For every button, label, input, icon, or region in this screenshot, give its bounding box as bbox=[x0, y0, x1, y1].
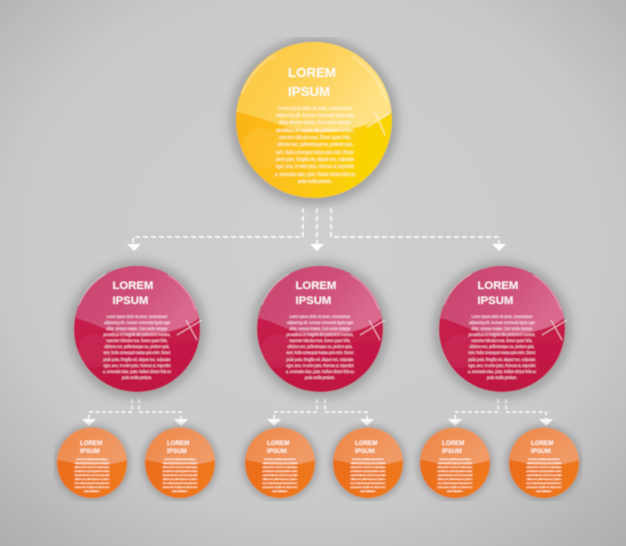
body text: penatibus et magnis dis parturient montes bbox=[438, 469, 473, 473]
heading: LOREM bbox=[531, 440, 553, 447]
body text: adipiscing elit. Aenean commodo ligula bbox=[162, 461, 198, 465]
circle: orange 4 bbox=[330, 424, 406, 502]
body text: eget, arcu. In enim justo, rhoncus ut, imperdiet bbox=[286, 363, 354, 368]
heading: LOREM bbox=[112, 280, 153, 292]
circle: orange 6: IPSUM bbox=[531, 448, 551, 455]
heading: LOREM bbox=[267, 440, 289, 447]
body text: a, venenatis vitae, justo. Nullam dictum felis eu bbox=[103, 369, 172, 374]
body text: pede mollis pretium. bbox=[360, 489, 376, 493]
body text: sem. Nulla consequat massa quis enim bbox=[162, 481, 198, 485]
body text: dolor. Aenean massa. Cum sociis natoque bbox=[262, 465, 298, 469]
body text: sem. Nulla consequat massa quis enim. Donec bbox=[286, 350, 354, 355]
circle: red middle bbox=[251, 261, 389, 399]
circle: orange 4: IPSUM bbox=[355, 448, 375, 455]
circle: orange 5: IPSUM bbox=[442, 448, 462, 455]
body text: pede justo, fringilla vel, aliquet nec, vulputate bbox=[468, 357, 536, 362]
body text: dolor. Aenean massa. Cum sociis natoque bbox=[526, 465, 562, 469]
body text: pede mollis pretium. bbox=[536, 489, 552, 493]
body text: pede justo, fringilla vel, aliquet nec bbox=[438, 485, 473, 489]
body text: ultricies nec, pellentesque eu, pretium bbox=[438, 477, 473, 481]
body text: pede mollis pretium. bbox=[447, 489, 463, 493]
circle: red middle: IPSUM bbox=[296, 295, 331, 307]
body text: dolor. Aenean massa. Cum sociis natoque bbox=[350, 465, 386, 469]
body text: eget, arcu. In enim justo, rhoncus ut, imperdiet bbox=[104, 363, 171, 368]
body text: ultricies nec, pellentesque eu, pretium bbox=[74, 477, 110, 481]
body text: penatibus et magnis dis parturient montes, bbox=[286, 332, 354, 337]
body text: penatibus et magnis dis parturient montes bbox=[74, 469, 110, 473]
connectors: middle branch bbox=[267, 399, 374, 426]
body text: penatibus et magnis dis parturient montes bbox=[262, 469, 298, 473]
circle: orange 3: IPSUM bbox=[267, 448, 287, 455]
body text: nascetur ridiculus mus. Donec quam felis, bbox=[472, 338, 532, 343]
body text: adipiscing elit. Aenean commodo ligula eget bbox=[287, 320, 354, 325]
infographic content bbox=[54, 37, 582, 502]
heading: LOREM bbox=[80, 440, 102, 447]
body text: sem. Nulla consequat massa quis enim bbox=[74, 481, 110, 485]
circle: red left: IPSUM bbox=[112, 295, 148, 307]
body text: sem. Nulla consequat massa quis enim bbox=[526, 481, 562, 485]
body text: dolor. Aenean massa. Cum sociis natoque bbox=[74, 465, 110, 469]
body text: nascetur ridiculus mus. Donec quam felis bbox=[74, 473, 110, 477]
body text: pede justo, fringilla vel, aliquet nec bbox=[350, 485, 386, 489]
body text: Lorem ipsum dolor sit amet, consectetuer bbox=[106, 314, 168, 319]
connectors: top level to second level bbox=[127, 208, 506, 251]
body text: nascetur ridiculus mus. Donec quam felis, bbox=[106, 338, 168, 343]
body text: sem. Nulla consequat massa quis enim bbox=[262, 481, 298, 485]
body text: dolor. Aenean massa. Cum sociis natoque bbox=[290, 326, 351, 331]
body text: nascetur ridiculus mus. Donec quam felis bbox=[162, 473, 198, 477]
heading: LOREM bbox=[288, 65, 336, 80]
body text: adipiscing elit. Aenean commodo ligula bbox=[74, 461, 110, 465]
circle: orange 6 bbox=[506, 424, 582, 502]
body text: adipiscing elit. Aenean commodo ligula eget bbox=[469, 320, 536, 325]
circle: red left bbox=[68, 261, 206, 399]
body text: ultricies nec, pellentesque eu, pretium bbox=[526, 477, 562, 481]
body text: pede justo, fringilla vel, aliquet nec, vulputate bbox=[276, 157, 354, 163]
body text: ultricies nec, pellentesque eu, pretium bbox=[262, 477, 298, 481]
body text: sem. Nulla consequat massa quis enim bbox=[438, 481, 473, 485]
body text bbox=[262, 457, 298, 493]
body text bbox=[526, 457, 562, 493]
circle: orange 1: IPSUM bbox=[80, 448, 100, 455]
body text: pede justo, fringilla vel, aliquet nec bbox=[262, 485, 298, 489]
body text: pede mollis pretium. bbox=[272, 489, 288, 493]
connectors: left branch bbox=[82, 399, 188, 426]
sparkle bbox=[360, 320, 385, 340]
body text: penatibus et magnis dis parturient montes, bbox=[468, 332, 536, 337]
sparkle bbox=[542, 320, 567, 340]
body text: adipiscing elit. Aenean commodo ligula eget bbox=[276, 113, 354, 119]
body text: Lorem ipsum dolor sit amet, consectetuer bbox=[278, 106, 352, 112]
body text: sem. Nulla consequat massa quis enim. Donec bbox=[468, 350, 536, 355]
heading: LOREM bbox=[355, 440, 377, 447]
body text: dolor. Aenean massa. Cum sociis natoque bbox=[472, 326, 533, 331]
body text: adipiscing elit. Aenean commodo ligula bbox=[438, 461, 473, 465]
body text: pede mollis pretium. bbox=[305, 375, 335, 380]
body text: pede mollis pretium. bbox=[172, 489, 188, 493]
circle: orange 1 bbox=[54, 424, 130, 502]
body text: eget, arcu. In enim justo, rhoncus ut, imperdiet bbox=[468, 363, 536, 368]
body text: a, venenatis vitae, justo. Nullam dictum felis eu bbox=[275, 172, 355, 178]
body text: eget, arcu. In enim justo, rhoncus ut, imperdiet bbox=[276, 164, 354, 170]
body text: ultricies nec, pellentesque eu, pretium quis, bbox=[288, 344, 352, 349]
body text: Lorem ipsum dolor sit amet, consectetuer bbox=[439, 457, 471, 461]
body text: Lorem ipsum dolor sit amet, consectetuer bbox=[290, 314, 351, 319]
body text: Lorem ipsum dolor sit amet, consectetuer bbox=[472, 314, 533, 319]
body text: dolor. Aenean massa. Cum sociis natoque bbox=[162, 465, 198, 469]
connectors: right branch bbox=[448, 399, 553, 426]
body text: Lorem ipsum dolor sit amet, consectetuer bbox=[264, 457, 296, 461]
body text: Lorem ipsum dolor sit amet, consectetuer bbox=[528, 457, 560, 461]
heading: LOREM bbox=[478, 280, 518, 292]
body text: nascetur ridiculus mus. Donec quam felis bbox=[350, 473, 386, 477]
body text bbox=[286, 314, 355, 380]
heading: LOREM bbox=[167, 440, 189, 447]
body text: ultricies nec, pellentesque eu, pretium quis, bbox=[277, 142, 353, 148]
body text: nascetur ridiculus mus. Donec quam felis, bbox=[290, 338, 350, 343]
body text bbox=[162, 457, 198, 493]
body text: ultricies nec, pellentesque eu, pretium bbox=[350, 477, 386, 481]
body text: ultricies nec, pellentesque eu, pretium bbox=[162, 477, 198, 481]
body text: Lorem ipsum dolor sit amet, consectetuer bbox=[164, 457, 196, 461]
body text: adipiscing elit. Aenean commodo ligula bbox=[262, 461, 298, 465]
body text: Lorem ipsum dolor sit amet, consectetuer bbox=[76, 457, 108, 461]
body text: adipiscing elit. Aenean commodo ligula eget bbox=[104, 320, 171, 325]
body text: pede justo, fringilla vel, aliquet nec, vulputate bbox=[286, 357, 354, 362]
body text: nascetur ridiculus mus. Donec quam felis bbox=[262, 473, 298, 477]
body text: penatibus et magnis dis parturient montes, bbox=[276, 128, 354, 134]
body text: nascetur ridiculus mus. Donec quam felis, bbox=[279, 135, 351, 141]
body text: pede mollis pretium. bbox=[298, 179, 332, 185]
body text: pede justo, fringilla vel, aliquet nec bbox=[526, 485, 562, 489]
circle: red right: IPSUM bbox=[478, 295, 513, 307]
body text bbox=[350, 457, 386, 493]
body text: nascetur ridiculus mus. Donec quam felis bbox=[438, 473, 473, 477]
body text: Lorem ipsum dolor sit amet, consectetuer bbox=[352, 457, 384, 461]
body text: sem. Nulla consequat massa quis enim. Donec bbox=[104, 350, 170, 355]
circle: top yellow bbox=[230, 37, 398, 205]
circle: orange 2: IPSUM bbox=[167, 448, 187, 455]
body text: dolor. Aenean massa. Cum sociis natoque bbox=[279, 120, 351, 126]
body text: pede justo, fringilla vel, aliquet nec bbox=[162, 485, 198, 489]
circle: orange 2 bbox=[142, 424, 218, 502]
body text: sem. Nulla consequat massa quis enim bbox=[350, 481, 386, 485]
body text: adipiscing elit. Aenean commodo ligula bbox=[526, 461, 562, 465]
heading: LOREM bbox=[296, 280, 336, 292]
body text: pede mollis pretium. bbox=[84, 489, 100, 493]
body text: ultricies nec, pellentesque eu, pretium quis, bbox=[104, 344, 170, 349]
circle: orange 3 bbox=[242, 424, 318, 502]
circle: red right bbox=[433, 261, 571, 399]
body text: adipiscing elit. Aenean commodo ligula bbox=[350, 461, 386, 465]
body text: nascetur ridiculus mus. Donec quam felis bbox=[526, 473, 562, 477]
circle: orange 5 bbox=[416, 424, 494, 502]
body text: a, venenatis vitae, justo. Nullam dictum felis eu bbox=[468, 369, 537, 374]
body text: a, venenatis vitae, justo. Nullam dictum felis eu bbox=[286, 369, 355, 374]
heading: LOREM bbox=[442, 440, 464, 447]
body text: penatibus et magnis dis parturient montes bbox=[350, 469, 386, 473]
body text bbox=[275, 106, 355, 185]
body text: penatibus et magnis dis parturient montes bbox=[526, 469, 562, 473]
body text bbox=[438, 457, 473, 493]
body text bbox=[74, 457, 110, 493]
body text: sem. Nulla consequat massa quis enim. Donec bbox=[276, 150, 354, 156]
body text: dolor. Aenean massa. Cum sociis natoque bbox=[106, 326, 168, 331]
circle: top yellow: IPSUM bbox=[288, 84, 330, 99]
body text: pede mollis pretium. bbox=[487, 375, 517, 380]
body text: pede justo, fringilla vel, aliquet nec bbox=[74, 485, 110, 489]
body text: penatibus et magnis dis parturient montes, bbox=[104, 332, 170, 337]
body text: pede mollis pretium. bbox=[122, 375, 152, 380]
body text: ultricies nec, pellentesque eu, pretium quis, bbox=[470, 344, 534, 349]
sparkle bbox=[177, 320, 202, 340]
body text bbox=[468, 314, 537, 380]
body text: pede justo, fringilla vel, aliquet nec, vulputate bbox=[104, 357, 171, 362]
body text: dolor. Aenean massa. Cum sociis natoque bbox=[438, 465, 473, 469]
body text bbox=[103, 314, 172, 380]
sparkle bbox=[367, 112, 390, 135]
body text: penatibus et magnis dis parturient montes bbox=[162, 469, 198, 473]
